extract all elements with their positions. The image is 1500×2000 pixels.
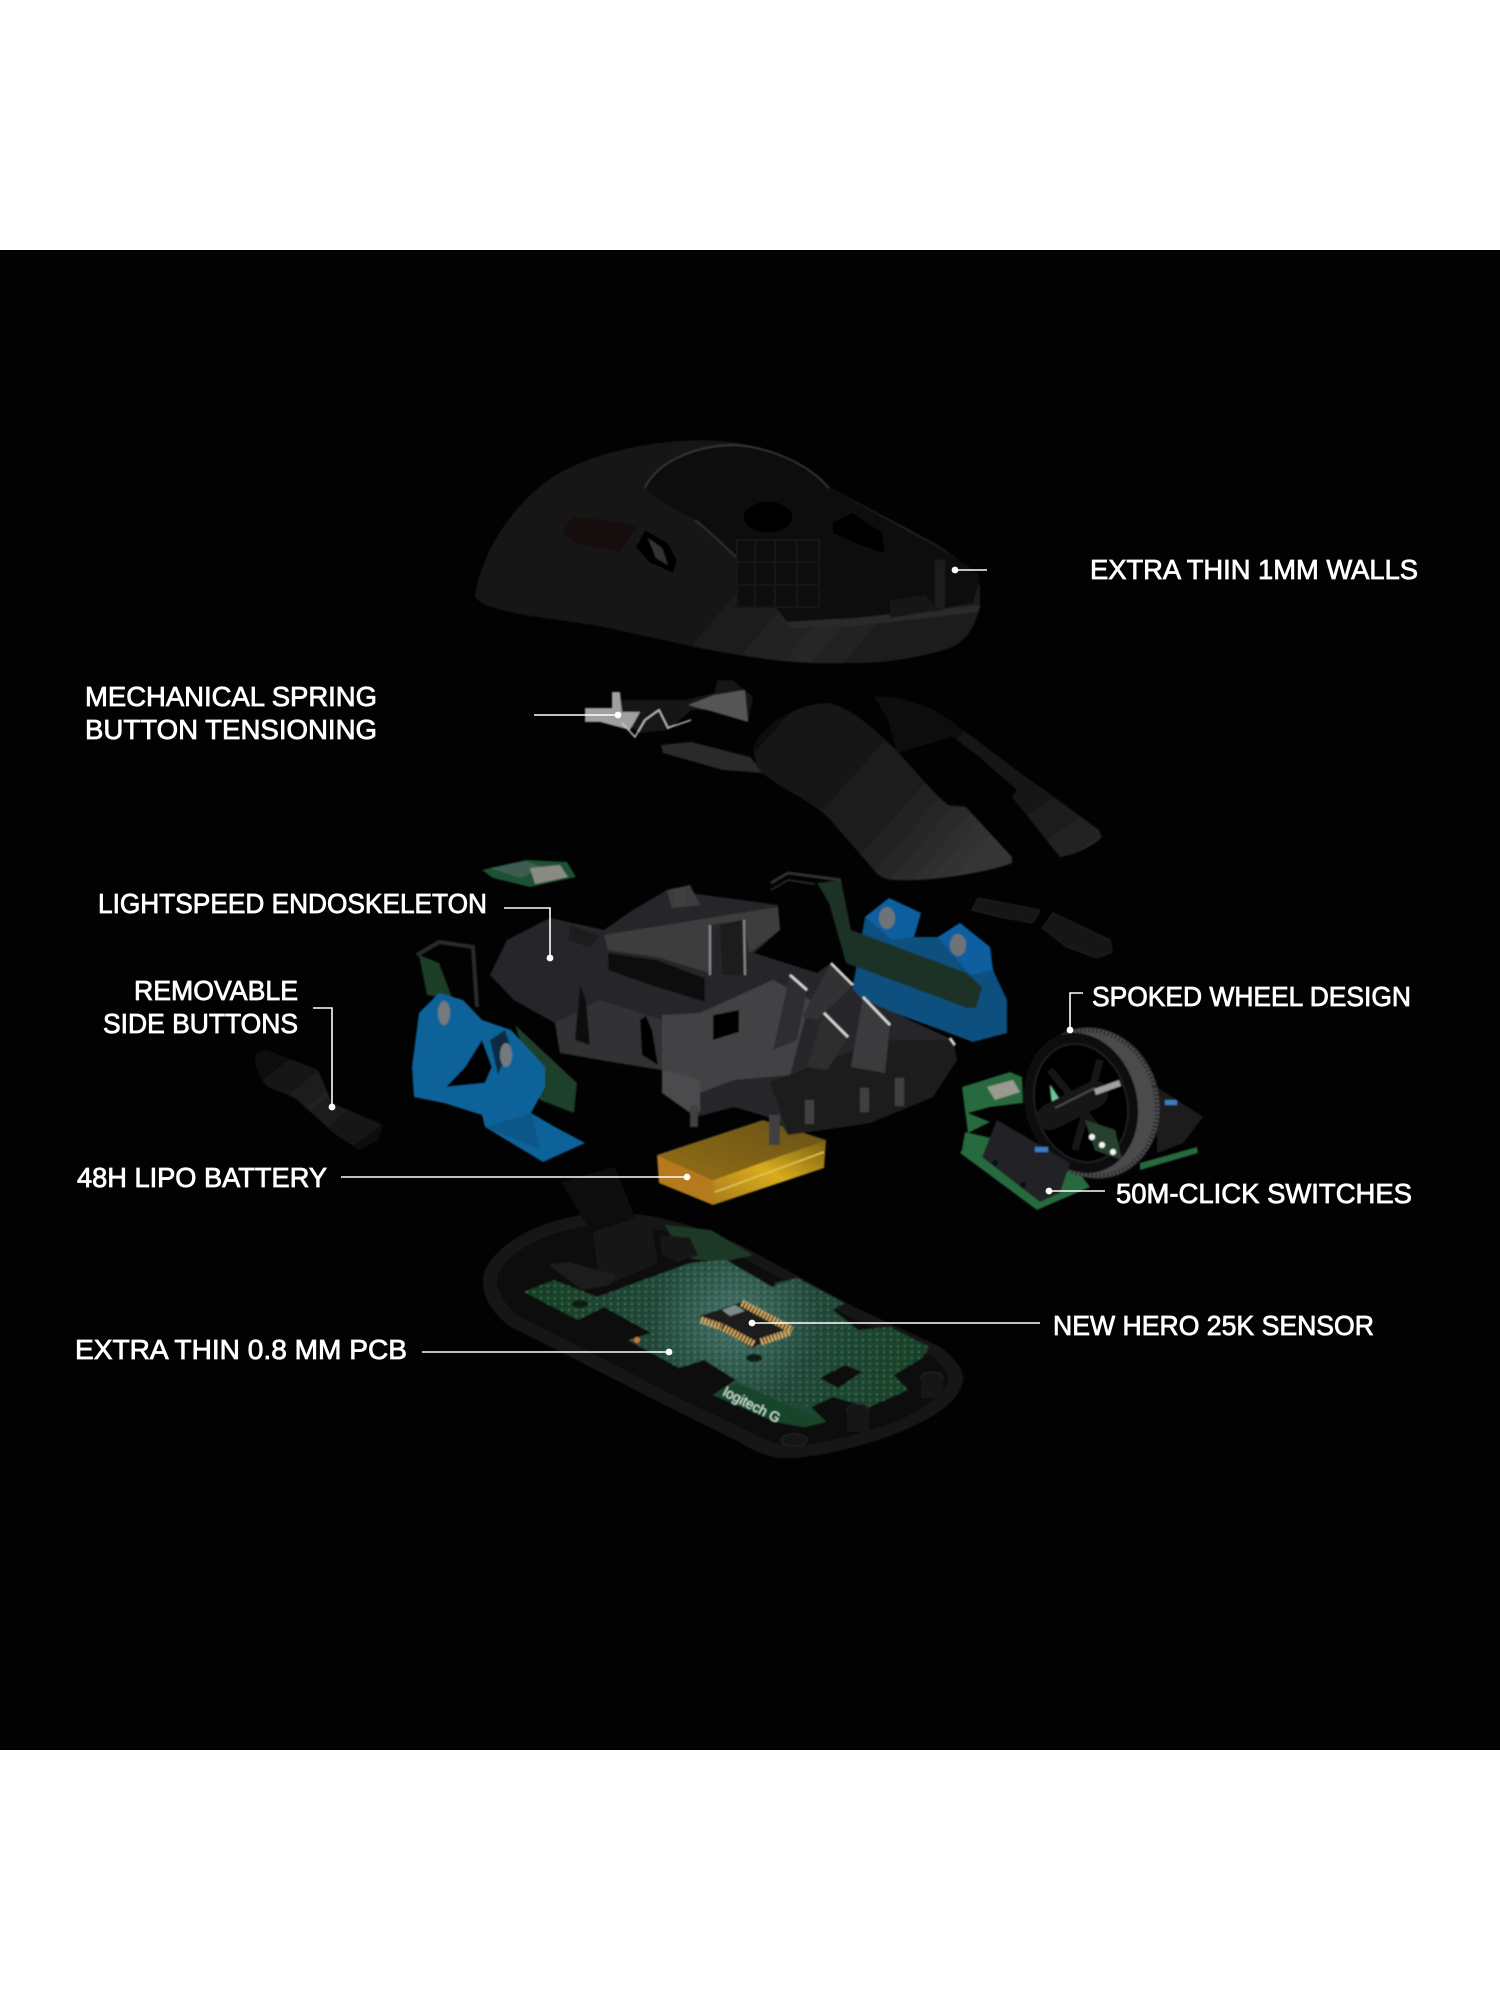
callout: side buttons: REMOVABLE [134, 975, 298, 1006]
top right side parts [972, 898, 1112, 958]
endoskeleton frame [490, 885, 957, 1145]
callout: sensor [749, 1310, 1374, 1341]
callout: extra thin walls: EXTRA THIN 1MM WALLS [1090, 554, 1418, 585]
callout: spoked wheel: SPOKED WHEEL DESIGN [1092, 981, 1411, 1012]
callout: battery: 48H LIPO BATTERY [77, 1162, 327, 1193]
rear switch [1157, 1087, 1203, 1153]
callout: mechanical spring: MECHANICAL SPRING [85, 681, 377, 712]
callout: spoked wheel [1067, 981, 1411, 1033]
callout: PCB: EXTRA THIN 0.8 MM PCB [75, 1334, 407, 1365]
top shell [475, 440, 980, 663]
small PCB module [482, 860, 576, 887]
callout: endoskeleton [98, 888, 553, 961]
front switch [982, 1120, 1070, 1202]
callout: sensor: NEW HERO 25K SENSOR [1053, 1310, 1374, 1341]
side button [255, 1050, 383, 1150]
right blue hinge assembly [771, 873, 1007, 1042]
scroll wheel [1009, 1013, 1176, 1193]
sensor chip [700, 1302, 792, 1348]
left blue hinge assembly [412, 942, 585, 1162]
base plate with PCB [483, 1213, 963, 1458]
panel: black background [0, 250, 1500, 1750]
exploded mouse illustration [255, 440, 1203, 1458]
callout: mechanical spring [85, 681, 621, 745]
callout: switches: 50M-CLICK SWITCHES [1116, 1178, 1412, 1209]
spring tension parts [585, 680, 764, 773]
callout: side buttons [103, 975, 335, 1110]
logitech G logo on PCB: logitech G [721, 1383, 783, 1426]
callout: mechanical spring: BUTTON TENSIONING [85, 714, 377, 745]
callout: endoskeleton: LIGHTSPEED ENDOSKELETON [98, 888, 487, 919]
callout: battery [77, 1162, 690, 1193]
callout: side buttons: SIDE BUTTONS [103, 1008, 298, 1039]
wheel and switches [960, 1013, 1203, 1210]
left top button [753, 703, 1012, 880]
right top button [874, 696, 1102, 857]
black stand on plate [549, 1167, 698, 1290]
callout: extra thin walls [952, 554, 1418, 585]
plate standoffs [781, 1372, 943, 1446]
battery [657, 1120, 826, 1205]
callout: PCB [75, 1334, 672, 1365]
green switch boards [960, 1072, 1198, 1210]
